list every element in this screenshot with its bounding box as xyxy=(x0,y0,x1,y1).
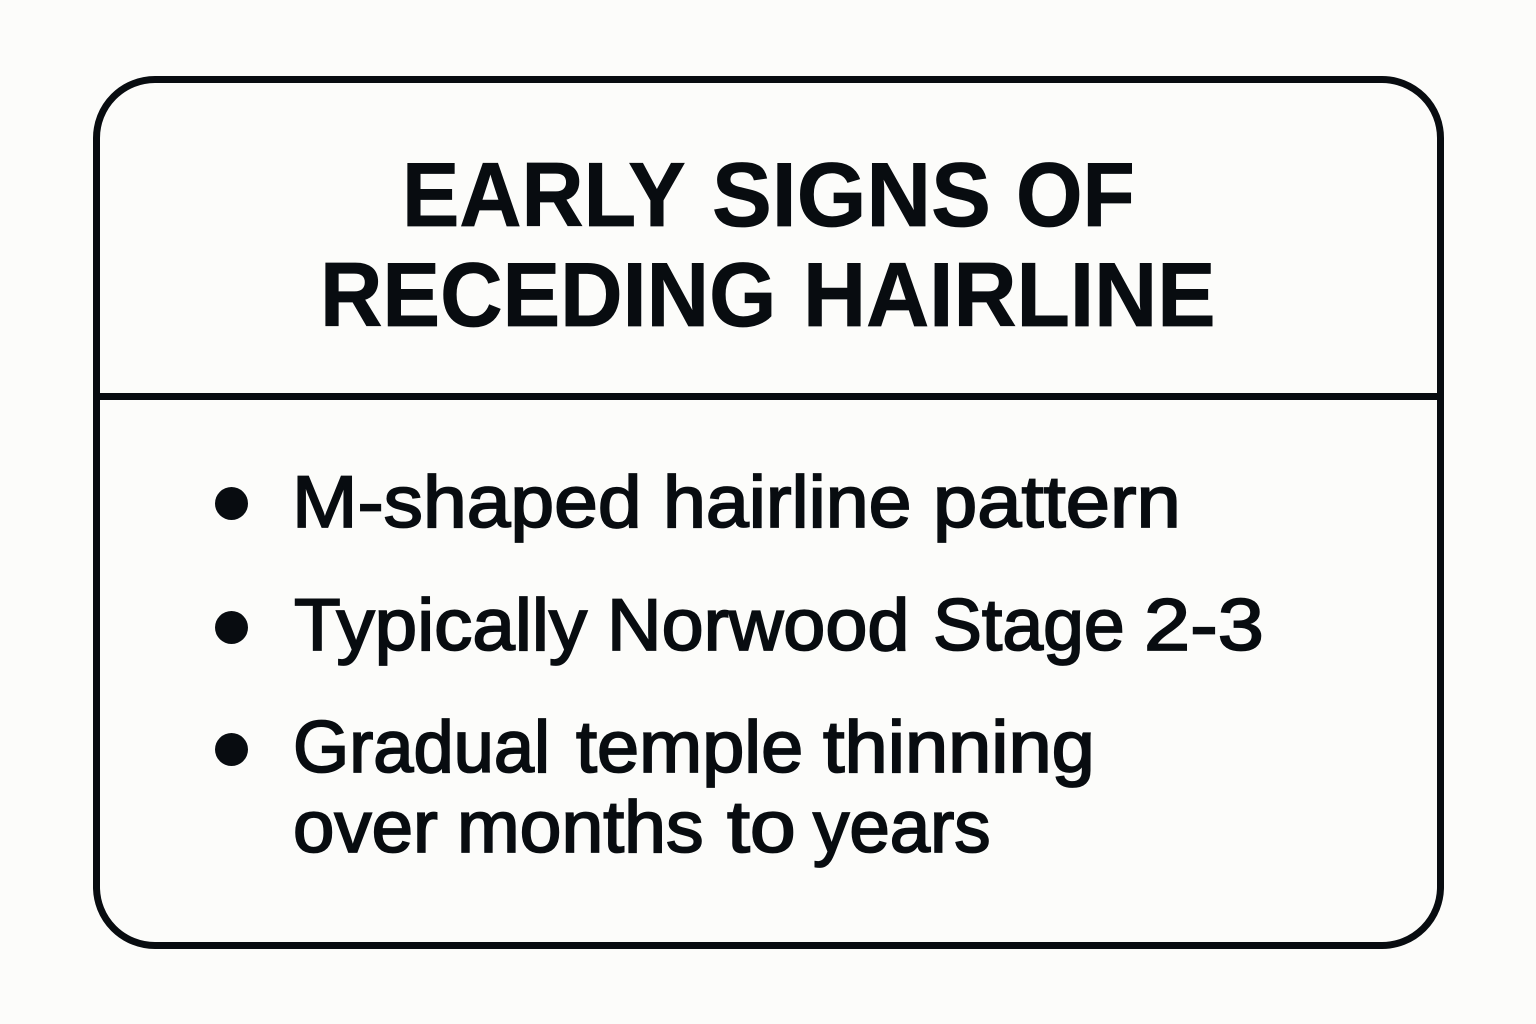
list item: Typically Norwood Stage 2-3: 2-3 xyxy=(1144,585,1264,666)
title: EARLY xyxy=(402,145,686,246)
list item: Typically Norwood Stage 2-3: Typically xyxy=(294,585,587,666)
divider line xyxy=(97,393,1440,400)
list item: Gradual temple thinning over months to years: temple xyxy=(576,707,803,788)
title xyxy=(320,145,1216,346)
title: OF xyxy=(1016,145,1135,246)
list item: Gradual temple thinning over months to years xyxy=(215,707,1095,868)
list item: M-shaped hairline pattern xyxy=(215,462,1181,543)
list item: Typically Norwood Stage 2-3: Norwood xyxy=(607,585,909,666)
list item: Typically Norwood Stage 2-3: Stage xyxy=(933,585,1125,666)
title: SIGNS xyxy=(712,145,991,246)
list item: Gradual temple thinning over months to years: Gradual xyxy=(293,707,550,788)
list item: Gradual temple thinning over months to years: years xyxy=(813,787,991,868)
list item: M-shaped hairline pattern: hairline xyxy=(663,462,912,543)
list item: Gradual temple thinning over months to years: over xyxy=(293,787,438,868)
panel: card xyxy=(93,76,1444,949)
list item: Gradual temple thinning over months to years: to xyxy=(727,787,796,868)
list item: M-shaped hairline pattern: pattern xyxy=(933,462,1181,543)
list item: M-shaped hairline pattern: M-shaped xyxy=(292,462,642,543)
list item: Gradual temple thinning over months to years: thinning xyxy=(823,707,1095,788)
bullet list xyxy=(215,462,1264,868)
title: HAIRLINE xyxy=(803,245,1216,346)
list item: Gradual temple thinning over months to years: months xyxy=(457,787,704,868)
list item: Typically Norwood Stage 2-3 xyxy=(215,585,1264,666)
title: RECEDING xyxy=(320,245,776,346)
